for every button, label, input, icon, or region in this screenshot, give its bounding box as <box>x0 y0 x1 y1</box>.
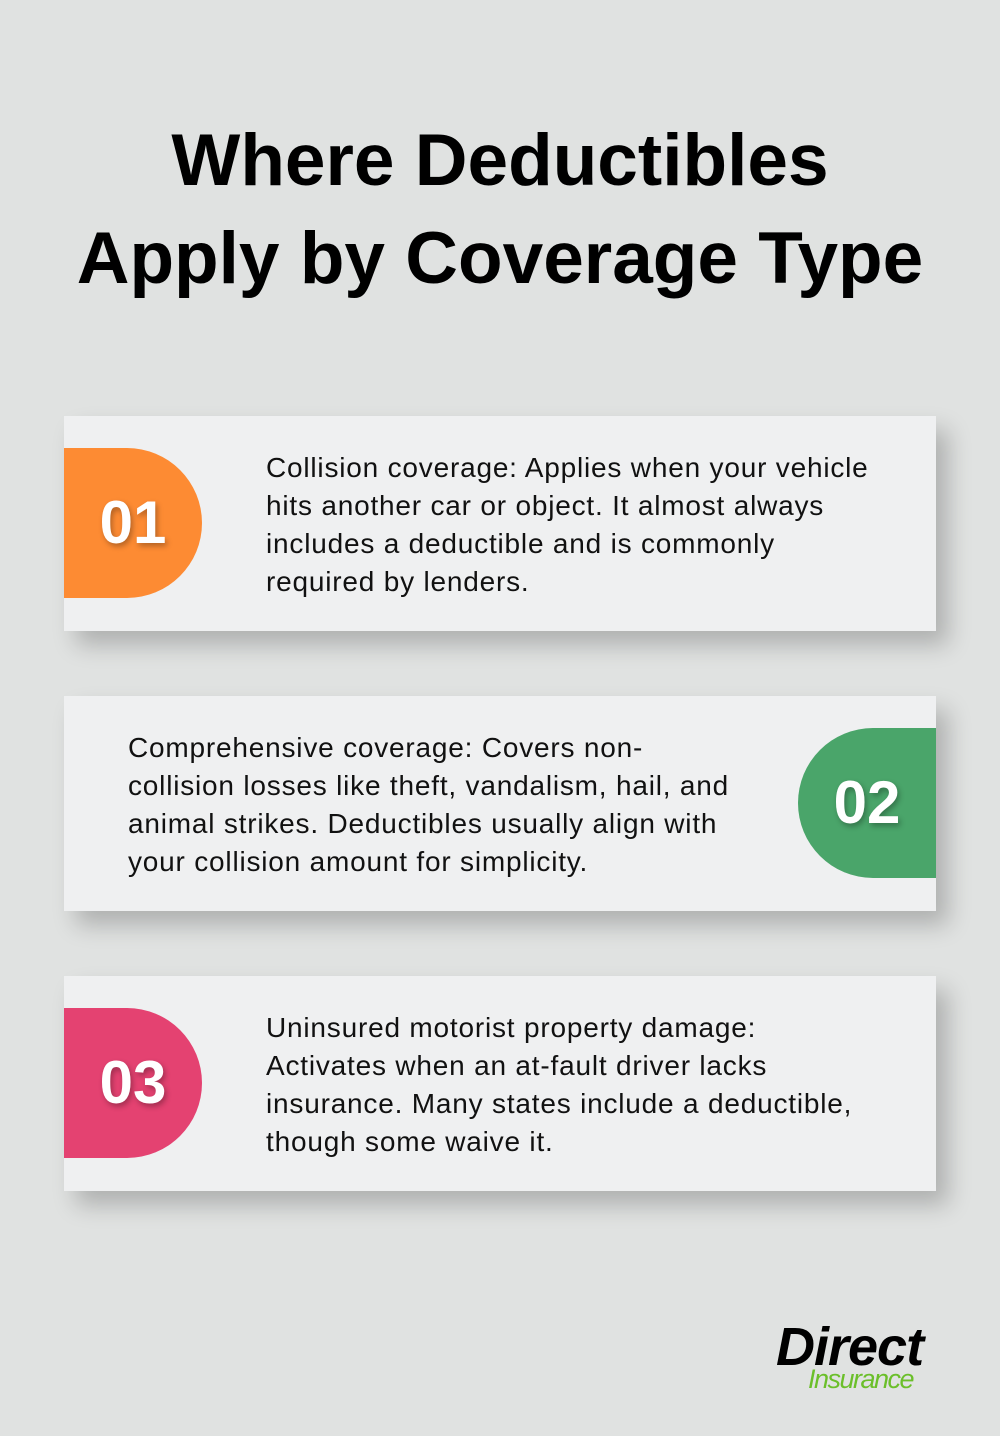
text: uninsured motorist: insurance. Many states include a deductible, <box>266 1088 852 1119</box>
text: collision <box>266 452 869 597</box>
text: comprehensive: animal strikes. Deductibles usually align with <box>128 808 717 839</box>
text: collision: includes a deductible and is commonly <box>266 528 775 559</box>
badge 02 <box>798 728 936 878</box>
panel: collision <box>64 416 936 631</box>
text: collision: hits another car or object. It almost always <box>266 490 824 521</box>
logo: Insurance <box>808 1364 913 1394</box>
text: uninsured motorist: Activates when an at-fault driver lacks <box>266 1050 767 1081</box>
panel: comprehensive <box>64 696 936 911</box>
title: Apply by Coverage Type <box>77 218 923 299</box>
title: Where Deductibles <box>171 120 829 201</box>
text: comprehensive: your collision amount for simplicity. <box>128 846 588 877</box>
panel: uninsured motorist <box>64 976 936 1191</box>
badge 03: 03 <box>100 1049 166 1116</box>
text: uninsured motorist <box>266 1012 852 1157</box>
badge 02: 02 <box>834 769 900 836</box>
text: collision: Collision coverage: Applies when your vehicle <box>266 452 869 483</box>
text: uninsured motorist: though some waive it. <box>266 1126 554 1157</box>
text: comprehensive: collision losses like theft, vandalism, hail, and <box>128 770 729 801</box>
title <box>77 120 923 299</box>
badge 03 <box>64 1008 202 1158</box>
badge 01: 01 <box>100 489 166 556</box>
text: uninsured motorist: Uninsured motorist property damage: <box>266 1012 756 1043</box>
badge 01 <box>64 448 202 598</box>
text: collision: required by lenders. <box>266 566 529 597</box>
text: comprehensive <box>128 732 729 877</box>
text: comprehensive: Comprehensive coverage: Covers non- <box>128 732 643 763</box>
logo: Direct <box>776 1317 923 1377</box>
